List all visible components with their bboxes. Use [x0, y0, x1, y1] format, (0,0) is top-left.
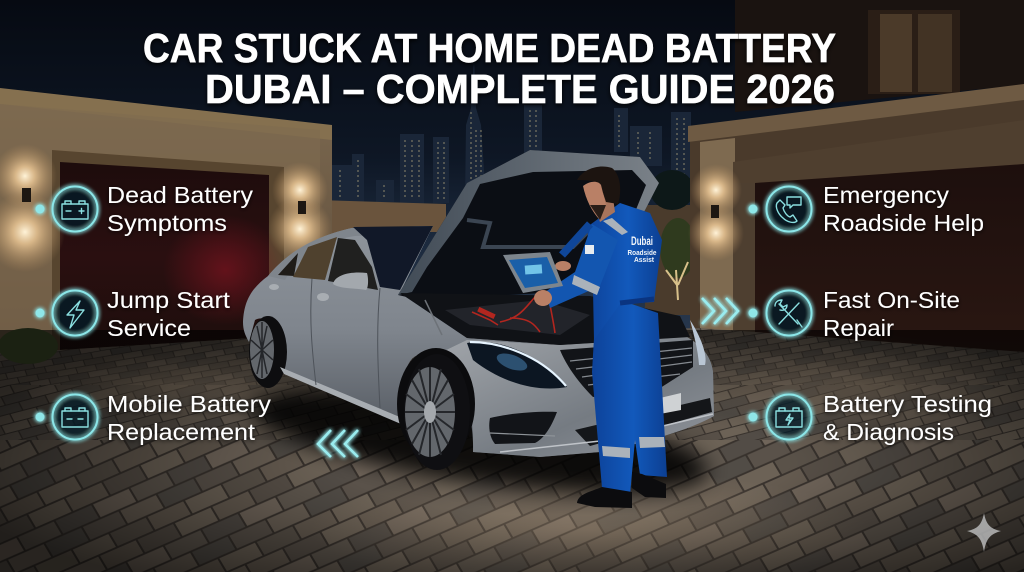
icon: battery with bolt [776, 408, 802, 427]
garage door right [755, 164, 1024, 352]
garden plant [645, 170, 696, 315]
car body [243, 226, 714, 457]
label: dead battery symptoms: Dead Battery [107, 182, 253, 208]
label: emergency roadside help [823, 182, 984, 236]
house: upper storey right [735, 0, 1024, 112]
mechanic [534, 166, 667, 508]
grille [560, 340, 693, 397]
callout: battery testing and diagnosis [748, 391, 992, 445]
rear wheel [249, 316, 287, 388]
sill [280, 367, 401, 424]
shrub [0, 328, 58, 364]
label: fast on-site repair [823, 287, 960, 341]
arrows: right chevrons [702, 298, 738, 324]
background: night sky [0, 0, 1024, 350]
wall lamps left [0, 144, 332, 272]
diagnostic tablet [503, 252, 563, 293]
label: dead battery symptoms [107, 182, 253, 236]
right headlight [690, 320, 706, 365]
label: mobile battery replacement [107, 391, 271, 445]
title: DUBAI – COMPLETE GUIDE 2026 [205, 66, 835, 112]
lower intake [489, 412, 557, 444]
label: jump start service [107, 287, 231, 341]
left garage [0, 88, 332, 354]
label: fast on-site repair: Repair [823, 315, 894, 341]
car [243, 150, 714, 470]
icon: phone with speech bubble [776, 197, 801, 222]
arrows: left chevrons [318, 430, 358, 457]
car shadow [246, 366, 714, 514]
low boundary wall [318, 200, 446, 255]
title [143, 25, 836, 112]
uniform text [628, 234, 656, 264]
label: emergency roadside help: Emergency [823, 182, 949, 208]
label: jump start service: Service [107, 315, 191, 341]
badge [585, 245, 594, 254]
side windows [278, 226, 433, 290]
number plate [660, 393, 681, 414]
label: battery testing and diagnosis: & Diagnosis [823, 419, 954, 445]
label: fast on-site repair: Fast On-Site [823, 287, 960, 313]
callout: fast on-site repair [748, 287, 960, 341]
legs [592, 300, 667, 495]
door line [311, 278, 380, 408]
waistband [620, 299, 654, 303]
icon: lightning bolt [67, 301, 84, 328]
label: battery testing and diagnosis [823, 391, 992, 445]
hand [534, 261, 571, 306]
skyline [330, 60, 691, 204]
label: dead battery symptoms: Symptoms [107, 210, 227, 236]
callout: emergency roadside help [748, 182, 984, 236]
label: battery testing and diagnosis: Battery Testing [823, 391, 992, 417]
garage door left [52, 150, 287, 354]
neck and head [577, 166, 620, 222]
sparkle mark [967, 513, 1001, 552]
engine bay [400, 293, 690, 345]
uniform text: Roadside [628, 248, 656, 257]
front end [440, 337, 714, 457]
arm [545, 224, 618, 308]
label: mobile battery replacement: Mobile Battery [107, 391, 271, 417]
torso [587, 203, 662, 340]
callout: mobile battery replacement [36, 391, 271, 445]
label: jump start service: Jump Start [107, 287, 231, 313]
paved driveway [0, 328, 1024, 572]
callout: jump start service [36, 287, 231, 341]
label: mobile battery replacement: Replacement [107, 419, 255, 445]
open hood [398, 150, 659, 300]
wall lamps right [688, 164, 744, 261]
wing mirror [333, 272, 368, 290]
roof [268, 226, 433, 280]
headlight [467, 342, 567, 389]
uniform text: Assist [634, 257, 655, 264]
front wheel [397, 348, 475, 470]
door handles [269, 284, 329, 301]
icon: crossed tools [775, 300, 802, 327]
icon: battery [62, 201, 88, 219]
callout: dead battery symptoms [36, 182, 253, 236]
reflective shoulder [603, 218, 628, 235]
label: emergency roadside help: Roadside Help [823, 210, 984, 236]
boots [577, 472, 666, 508]
icon: battery replacement [62, 408, 88, 427]
title: CAR STUCK AT HOME DEAD BATTERY [143, 25, 836, 71]
right garage [688, 84, 1024, 352]
uniform text: Dubai [631, 234, 653, 248]
